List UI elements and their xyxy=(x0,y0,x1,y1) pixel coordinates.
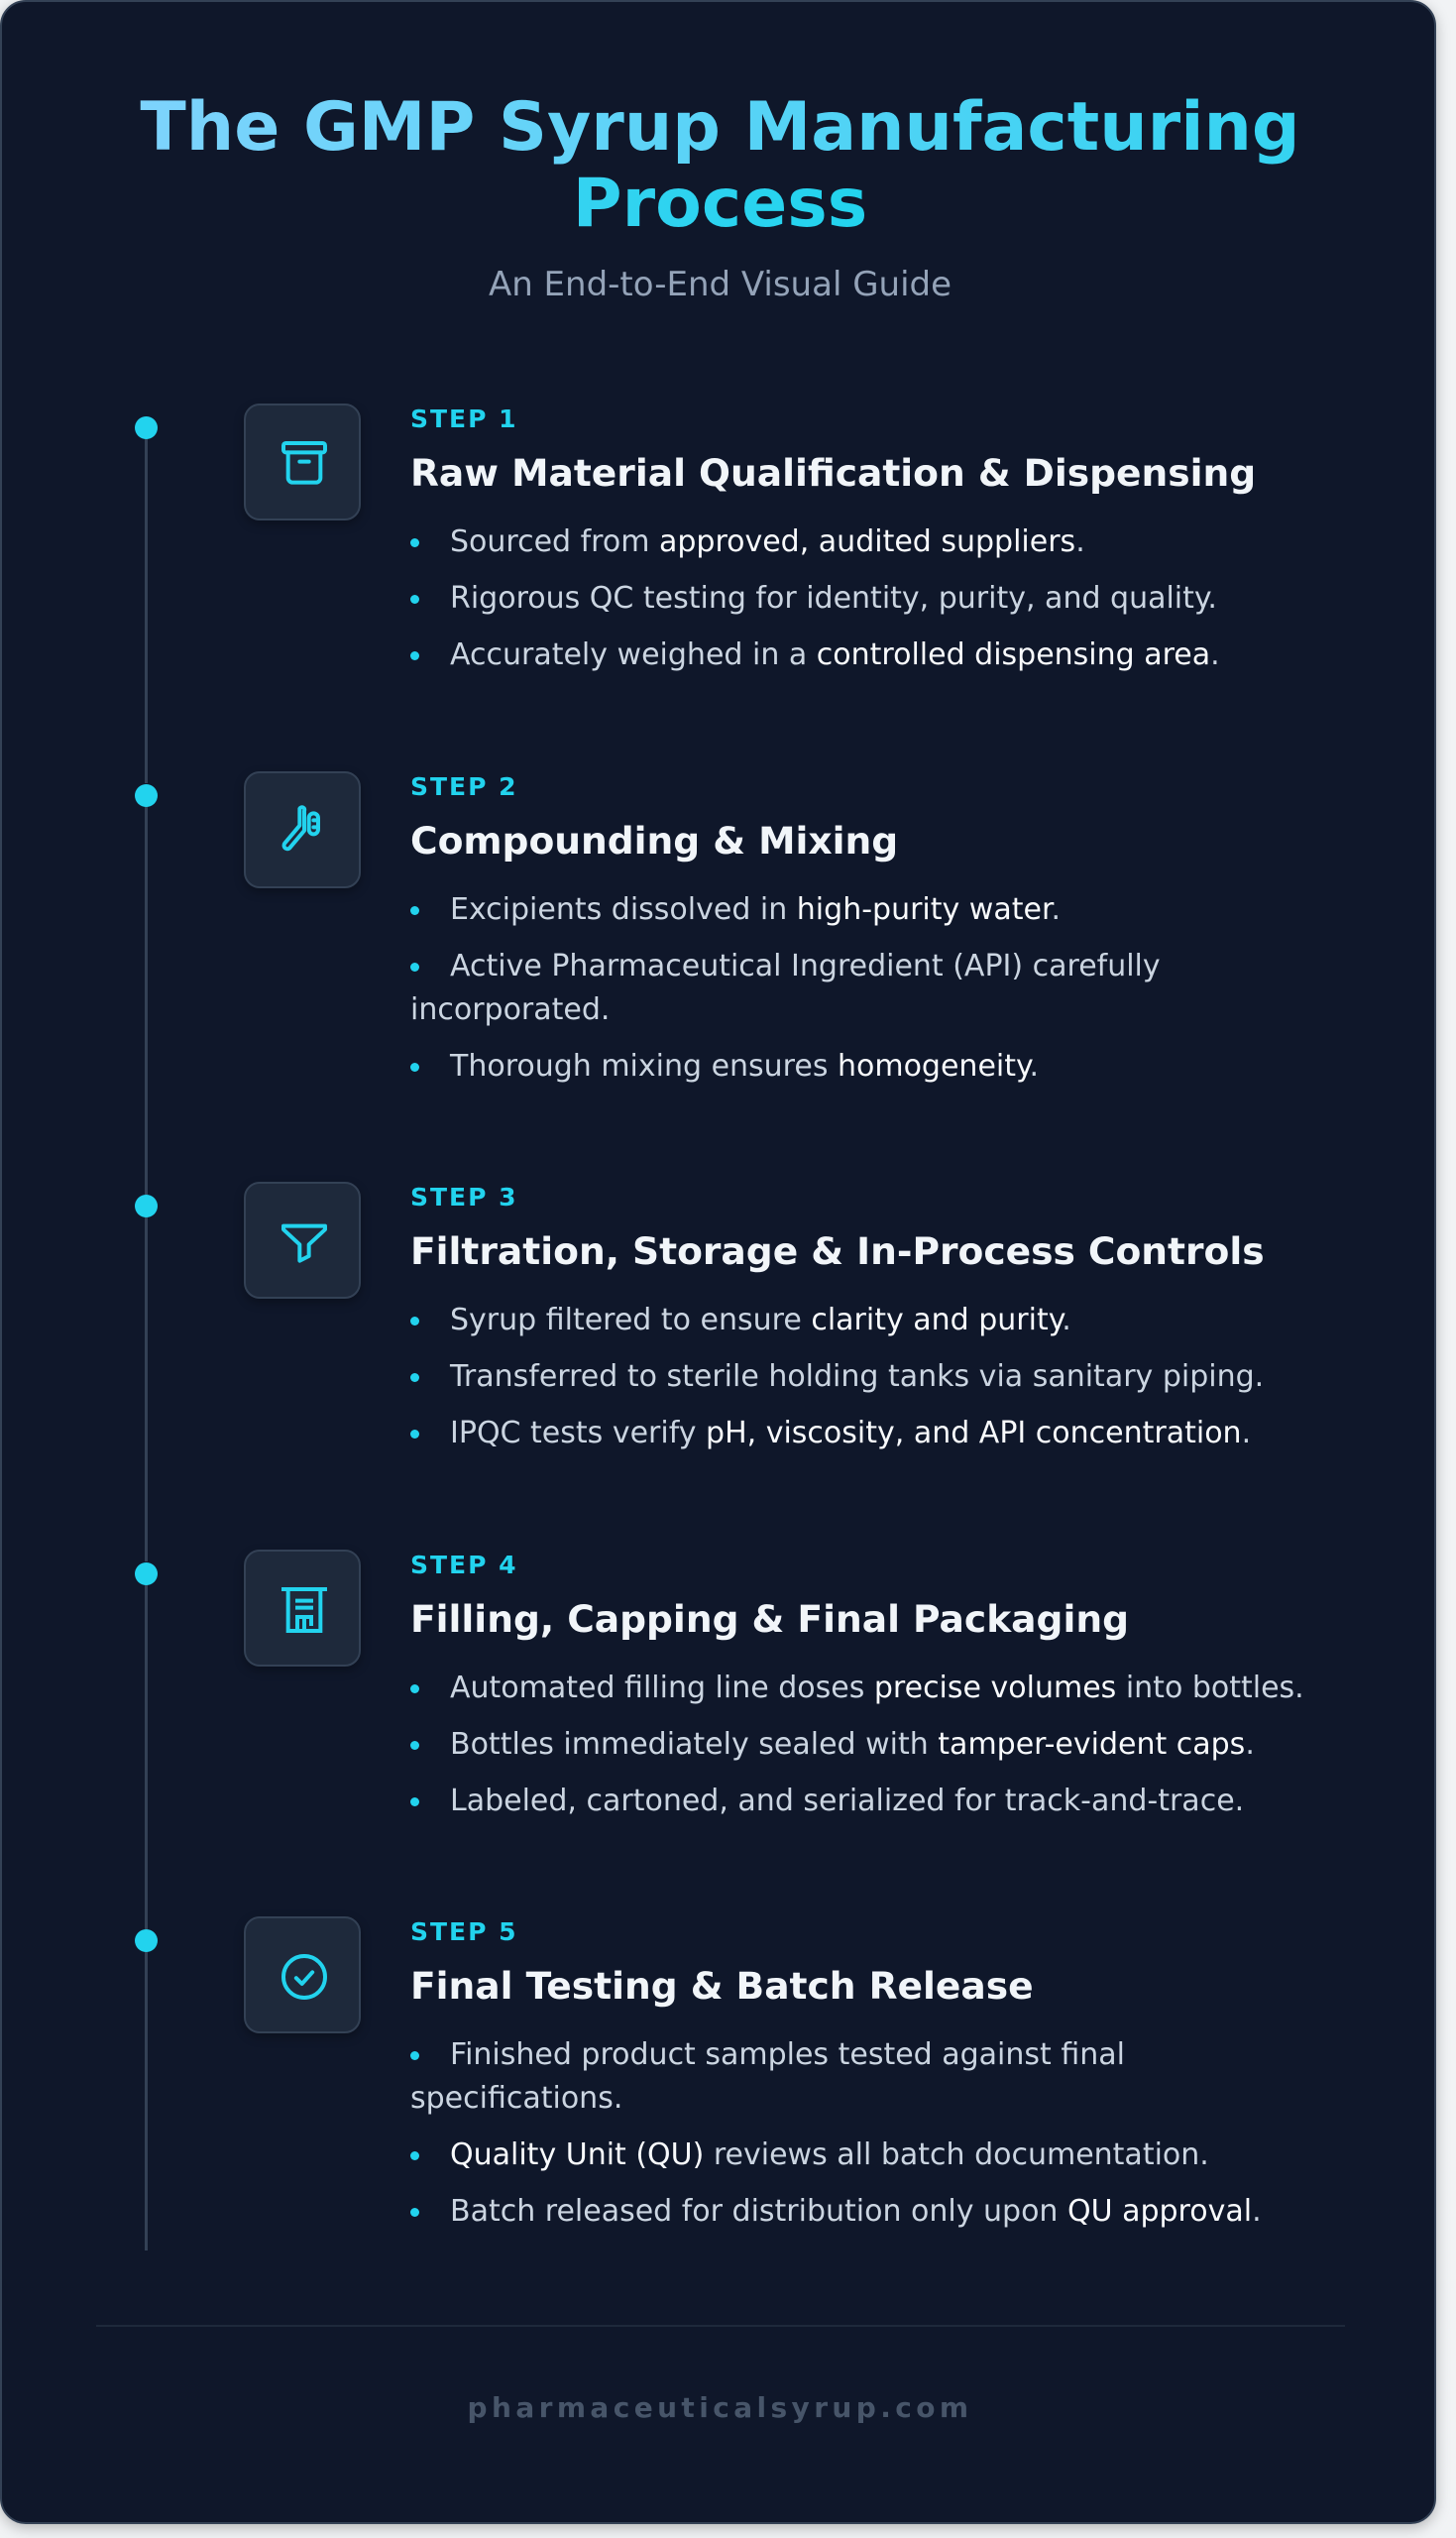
bullet: Thorough mixing ensures homogeneity. xyxy=(450,1049,1039,1084)
heading: Filling, Capping & Final Packaging xyxy=(410,1597,1129,1641)
bullet: Finished product samples tested against final specifications. xyxy=(410,2037,1125,2116)
bullet: Automated filling line doses precise volumes into bottles. xyxy=(450,1671,1304,1705)
timeline dot 1 xyxy=(135,416,158,439)
heading: Raw Material Qualification & Dispensing xyxy=(410,451,1256,495)
title: Process xyxy=(573,165,867,243)
icon: mixing xyxy=(244,771,361,888)
step label: STEP 5 xyxy=(410,1917,518,1946)
title: The GMP Syrup Manufacturing xyxy=(140,88,1300,167)
heading: Final Testing & Batch Release xyxy=(410,1964,1034,2008)
bullet: Labeled, cartoned, and serialized for track-and-trace. xyxy=(450,1784,1244,1818)
bullet: Quality Unit (QU) reviews all batch documentation. xyxy=(450,2137,1209,2172)
bullet: Rigorous QC testing for identity, purity, and quality. xyxy=(450,581,1217,616)
bullet: Syrup filtered to ensure clarity and purity. xyxy=(450,1303,1071,1337)
timeline line 4 xyxy=(145,1584,148,1929)
icon: container xyxy=(244,404,361,520)
step label: STEP 2 xyxy=(410,772,518,801)
bullet: Bottles immediately sealed with tamper-evident caps. xyxy=(450,1727,1255,1762)
step 2 xyxy=(244,771,1161,1084)
timeline line 1 xyxy=(145,438,148,783)
heading: Filtration, Storage & In-Process Controls xyxy=(410,1229,1265,1273)
timeline line 3 xyxy=(145,1216,148,1561)
step 5 xyxy=(244,1916,1262,2229)
bullet: IPQC tests verify pH, viscosity, and API concentration. xyxy=(450,1416,1251,1450)
heading: Compounding & Mixing xyxy=(410,819,898,863)
icon: packaging xyxy=(244,1550,361,1667)
step label: STEP 3 xyxy=(410,1183,518,1211)
timeline dot 4 xyxy=(135,1562,158,1585)
step 4 xyxy=(244,1550,1304,1818)
timeline dot 3 xyxy=(135,1195,158,1217)
timeline line 5 xyxy=(145,1951,148,2250)
bullet: Excipients dissolved in high-purity water. xyxy=(450,892,1061,927)
title xyxy=(140,88,1300,243)
bullet: Batch released for distribution only upon QU approval. xyxy=(450,2194,1262,2229)
bullet: Active Pharmaceutical Ingredient (API) carefully incorporated. xyxy=(410,949,1161,1027)
step label: STEP 1 xyxy=(410,404,518,433)
bullet: Transferred to sterile holding tanks via sanitary piping. xyxy=(450,1359,1264,1394)
subtitle: An End-to-End Visual Guide xyxy=(489,265,952,304)
step 1 xyxy=(244,404,1256,672)
timeline dot 5 xyxy=(135,1929,158,1952)
step 3 xyxy=(244,1182,1265,1450)
step label: STEP 4 xyxy=(410,1551,518,1579)
bullet: Accurately weighed in a controlled dispensing area. xyxy=(450,637,1220,672)
bullet: Sourced from approved, audited suppliers. xyxy=(450,524,1085,559)
footer: pharmaceuticalsyrup.com xyxy=(468,2391,972,2424)
timeline line 2 xyxy=(145,806,148,1195)
timeline dot 2 xyxy=(135,784,158,807)
icon: funnel xyxy=(244,1182,361,1299)
icon: check circle xyxy=(244,1916,361,2033)
